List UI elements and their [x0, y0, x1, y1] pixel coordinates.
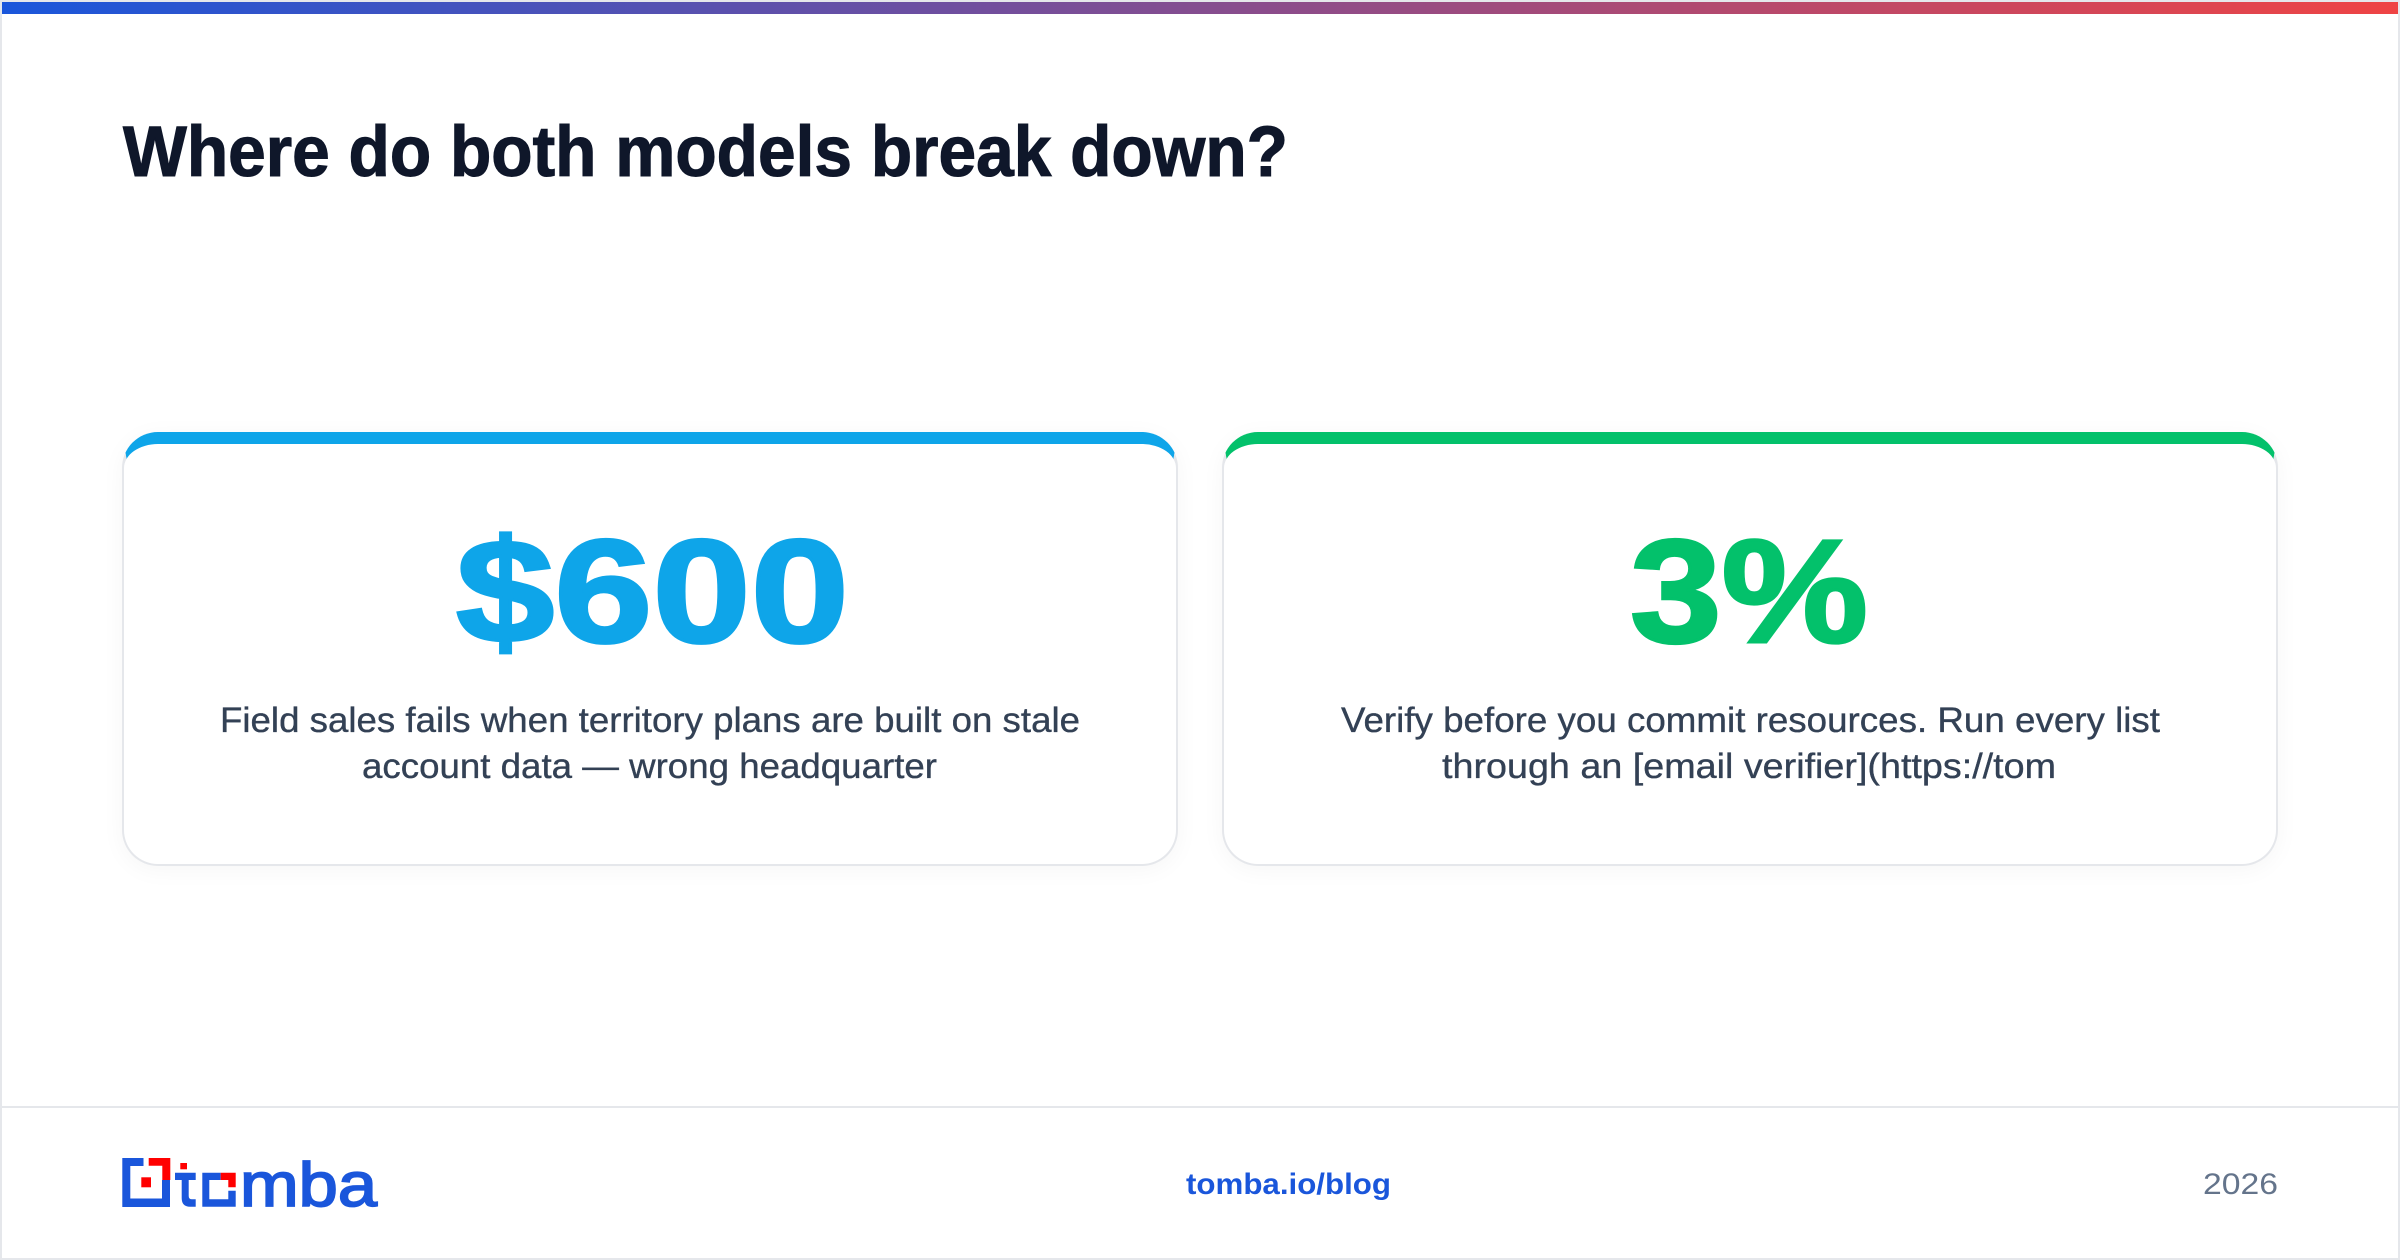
- stat description: field sales: [220, 701, 1080, 786]
- stat description: verification: Verify before you commit resources. Run every list: [1341, 701, 2160, 740]
- footer link: tomba.io/blog: [1186, 1168, 1391, 1201]
- stat description: field sales: account data — wrong headquarter: [362, 747, 937, 786]
- panel: field sales stat card: [122, 432, 1178, 866]
- icon: logo square mark: [122, 1158, 170, 1207]
- footer year: 2026: [2203, 1168, 2278, 1201]
- icon: logo stylised t and o: [175, 1163, 236, 1207]
- gradient top bar: [2, 2, 2398, 14]
- panel: verification stat card: [1222, 432, 2278, 866]
- stat value: $600: $600: [456, 510, 849, 674]
- stat value: 3%: 3%: [1630, 510, 1868, 674]
- stat description: field sales: Field sales fails when territory plans are built on stale: [220, 701, 1080, 740]
- logo wordmark letters: mba: [240, 1151, 378, 1220]
- stat description: verification: through an [email verifier](https://tom: [1442, 747, 2056, 786]
- footer logo: tomba: [122, 1151, 378, 1220]
- stat description: verification: [1340, 701, 2160, 786]
- title: Where do both models break down?: [123, 113, 1288, 192]
